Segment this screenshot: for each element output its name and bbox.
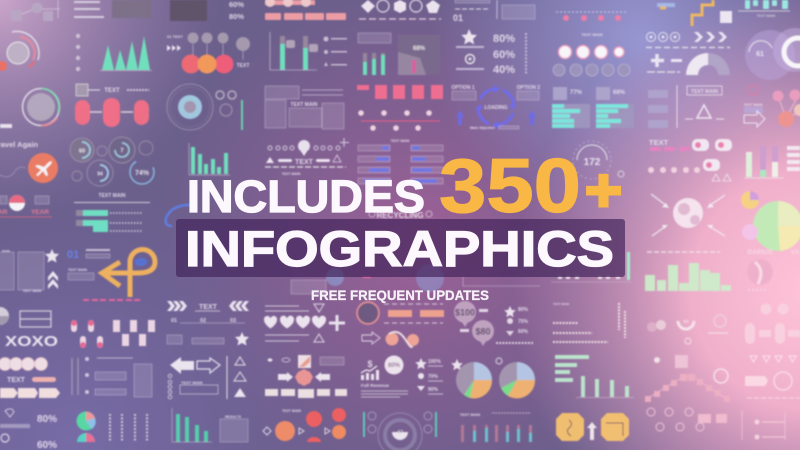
- green results chart: RESULTS: [225, 415, 242, 419]
- stat tiles with cyan bars: [552, 87, 634, 128]
- slide 01 heading: [453, 0, 535, 23]
- price bubbles: $100: [455, 308, 475, 318]
- pink flags and capsules: [71, 299, 155, 348]
- mini bar chart: [744, 146, 800, 178]
- revenue block: $: [367, 359, 373, 369]
- stats bottom left: [0, 409, 57, 450]
- progress bars with callouts: [270, 32, 347, 70]
- icon: plane badge: [0, 153, 58, 183]
- pink node diagram: TEXT: [104, 88, 120, 94]
- thermometer bars: [460, 413, 532, 442]
- pink rings and grey nodes: TEXT MAIN: [581, 32, 603, 37]
- radial dial cluster: [167, 84, 243, 130]
- percent labels: 80%: [229, 12, 244, 21]
- price bubbles: [454, 301, 494, 346]
- top pink blocks: [265, 0, 346, 20]
- title panel: [176, 219, 625, 277]
- percent stars right: [496, 306, 533, 343]
- chevron text row: TEXT: [199, 304, 218, 311]
- small green columns: [358, 33, 391, 75]
- icon list: [76, 34, 80, 71]
- mountain chart: [645, 355, 730, 402]
- photo tiles: [112, 0, 207, 21]
- panel: text main bars: [74, 193, 150, 232]
- percent labels: [229, 0, 244, 21]
- price bubbles: $80: [475, 326, 491, 336]
- percent stars right: 60%: [518, 329, 529, 335]
- loading ring: Main Objective: [470, 126, 495, 130]
- toggles and pills: TEXT: [649, 138, 669, 147]
- network nodes: [11, 0, 60, 21]
- coral node cluster: TEXT MAIN: [282, 409, 301, 413]
- pink cards: [357, 85, 443, 99]
- ring indicators: 60: [79, 148, 85, 154]
- numbered steps: 03: [230, 318, 236, 324]
- arrows and circular image: [651, 194, 725, 236]
- year chart: YEAR: [31, 209, 49, 216]
- road signs: [556, 413, 629, 441]
- targets and chevrons: [646, 32, 730, 48]
- numbered steps: 01: [171, 318, 177, 324]
- ring gauge: [0, 31, 39, 71]
- photo panel 68%: 68%: [413, 46, 426, 52]
- stats: icons and percentages: 40%: [493, 64, 515, 76]
- text main framed box: [648, 85, 724, 128]
- percent stars right: 75%: [518, 319, 529, 325]
- arrows and triangles: TEXT MAIN: [181, 380, 203, 385]
- orange loop arrow: [101, 249, 155, 297]
- top mint bars: [738, 0, 790, 18]
- triangle chart: [100, 36, 152, 70]
- green results chart: [172, 408, 248, 442]
- recycling label: RECYCLING: [376, 211, 424, 220]
- dial ring: [0, 88, 60, 128]
- dot columns: [110, 414, 147, 442]
- loading ring: [451, 85, 540, 130]
- pink timeline: [358, 110, 440, 131]
- toggles and pills: [648, 138, 732, 181]
- top mint bars: TEXT MAIN: [757, 14, 776, 18]
- ring indicators: 7: [121, 148, 124, 154]
- ring indicators: [70, 137, 154, 186]
- pin, arrow and network: [744, 85, 800, 127]
- percent labels: 60%: [229, 0, 244, 9]
- pink dot row: [556, 12, 626, 21]
- table rows: TEXT MAIN: [391, 139, 410, 143]
- pins and capsules far right: [745, 304, 800, 398]
- text main framed box: TEXT MAIN: [691, 89, 718, 95]
- year chart: [0, 195, 52, 217]
- stats bottom left: 80%: [37, 414, 57, 425]
- numbered note: TEXT MAIN: [68, 268, 87, 272]
- loading ring: LOADING: [484, 105, 508, 111]
- shape row: [359, 0, 441, 19]
- half circle and box: [0, 307, 51, 327]
- pie charts right: [741, 191, 800, 251]
- thermometer bars: TEXT MAIN: [460, 413, 480, 417]
- blue arc: [166, 205, 197, 226]
- circles flow: 01 TEXT: [167, 34, 183, 39]
- progress dots: [74, 1, 104, 18]
- pie charts center: [451, 358, 535, 398]
- green bar chart: [189, 143, 230, 175]
- text row with triangles: TEXT MAIN: [282, 172, 301, 176]
- flow diagram: [265, 355, 347, 398]
- circles flow: TEXT: [237, 63, 249, 69]
- subheading: free frequent updates: FREE FREQUENT UPDATES: [311, 287, 489, 303]
- large ring cluster 61: 61: [756, 51, 764, 58]
- text blocks left: [0, 249, 59, 293]
- mini pies: [76, 412, 96, 442]
- heading: infographics: INFOGRAPHICS: [185, 221, 614, 277]
- panel: text main bars: TEXT MAIN: [99, 193, 126, 199]
- numbered note: 01: [67, 249, 79, 261]
- rating dots panel: [553, 302, 625, 342]
- numbered steps: 02: [200, 318, 206, 324]
- revenue block: [361, 356, 408, 397]
- percent list: [415, 358, 443, 394]
- circles flow: [167, 32, 250, 74]
- percent list: 90%: [428, 387, 439, 393]
- DARIUS vs panel: DARIUS: [748, 249, 773, 256]
- revenue block: 80%: [388, 363, 401, 369]
- heading: includes: INCLUDES: [187, 171, 425, 222]
- stats: icons and percentages: 60%: [493, 49, 515, 61]
- concentric gauge: [364, 412, 436, 450]
- heading: 350: 350: [439, 144, 581, 229]
- stat tiles with cyan bars: 77%: [570, 90, 583, 96]
- percent list: 70%: [428, 374, 439, 380]
- xoxo text: XOXO: [5, 333, 58, 350]
- circles and pills row: [0, 358, 60, 398]
- plus, minus and half gauge: [647, 53, 730, 75]
- text blocks: TEXT MAIN: [291, 102, 318, 108]
- revenue block: Full Revenue: [361, 383, 390, 388]
- donuts faded: [647, 313, 728, 344]
- mint horizontal and vertical bars: [555, 355, 634, 398]
- rating dots panel: TEXT MAIN: [553, 302, 569, 306]
- side note lists: [72, 357, 152, 397]
- pink node diagram: [75, 84, 149, 127]
- numbered note: [67, 249, 147, 280]
- chevron text row: [167, 301, 249, 311]
- circles and pills row: TEXT: [7, 377, 26, 384]
- ring indicators: 94: [97, 172, 103, 178]
- hearts row: [264, 304, 345, 342]
- donuts faded: 53: [683, 319, 689, 324]
- arrows and triangles: [168, 356, 246, 399]
- process nodes: [647, 408, 785, 440]
- pin, arrow and network: TEXT MAIN: [744, 103, 763, 107]
- histogram: [645, 252, 731, 291]
- heading: plus sign: +: [585, 157, 622, 224]
- slide 01 heading: 01: [453, 13, 463, 23]
- DARIUS vs panel: [747, 249, 800, 290]
- table rows: [358, 139, 443, 184]
- text blocks left: TEXT MAIN: [23, 289, 42, 293]
- axis chart under title panel: [291, 252, 632, 294]
- percent stars right: 80%: [518, 307, 529, 313]
- loading ring: OPTION 1: [451, 85, 475, 91]
- DARIUS vs panel: VS: [791, 249, 800, 256]
- pin row with circles: [268, 138, 349, 156]
- ring indicators: 74%: [135, 170, 150, 177]
- stats: icons and percentages: 80%: [493, 33, 515, 45]
- percent list: 100%: [428, 359, 441, 365]
- orange stairs and square: [657, 0, 732, 26]
- text blocks: [265, 86, 344, 129]
- concentric gauge: 47: [397, 430, 403, 436]
- photo panel 68%: [398, 35, 440, 75]
- loading ring: OPTION 2: [517, 85, 540, 91]
- stats: icons and percentages: [456, 29, 526, 76]
- text blocks left: MAIN: [2, 249, 10, 253]
- pink rings and grey nodes: [553, 32, 630, 76]
- ring with pills: [357, 302, 444, 347]
- coral node cluster: [263, 408, 346, 442]
- numbered steps: [167, 318, 249, 346]
- stat tiles with cyan bars: 68%: [613, 90, 626, 96]
- text row with triangles: TEXT: [295, 159, 314, 166]
- large ring cluster 61: [745, 28, 800, 80]
- text row with triangles: [265, 155, 346, 176]
- gauge 172: [573, 141, 624, 179]
- gauge 172: 172: [584, 157, 601, 168]
